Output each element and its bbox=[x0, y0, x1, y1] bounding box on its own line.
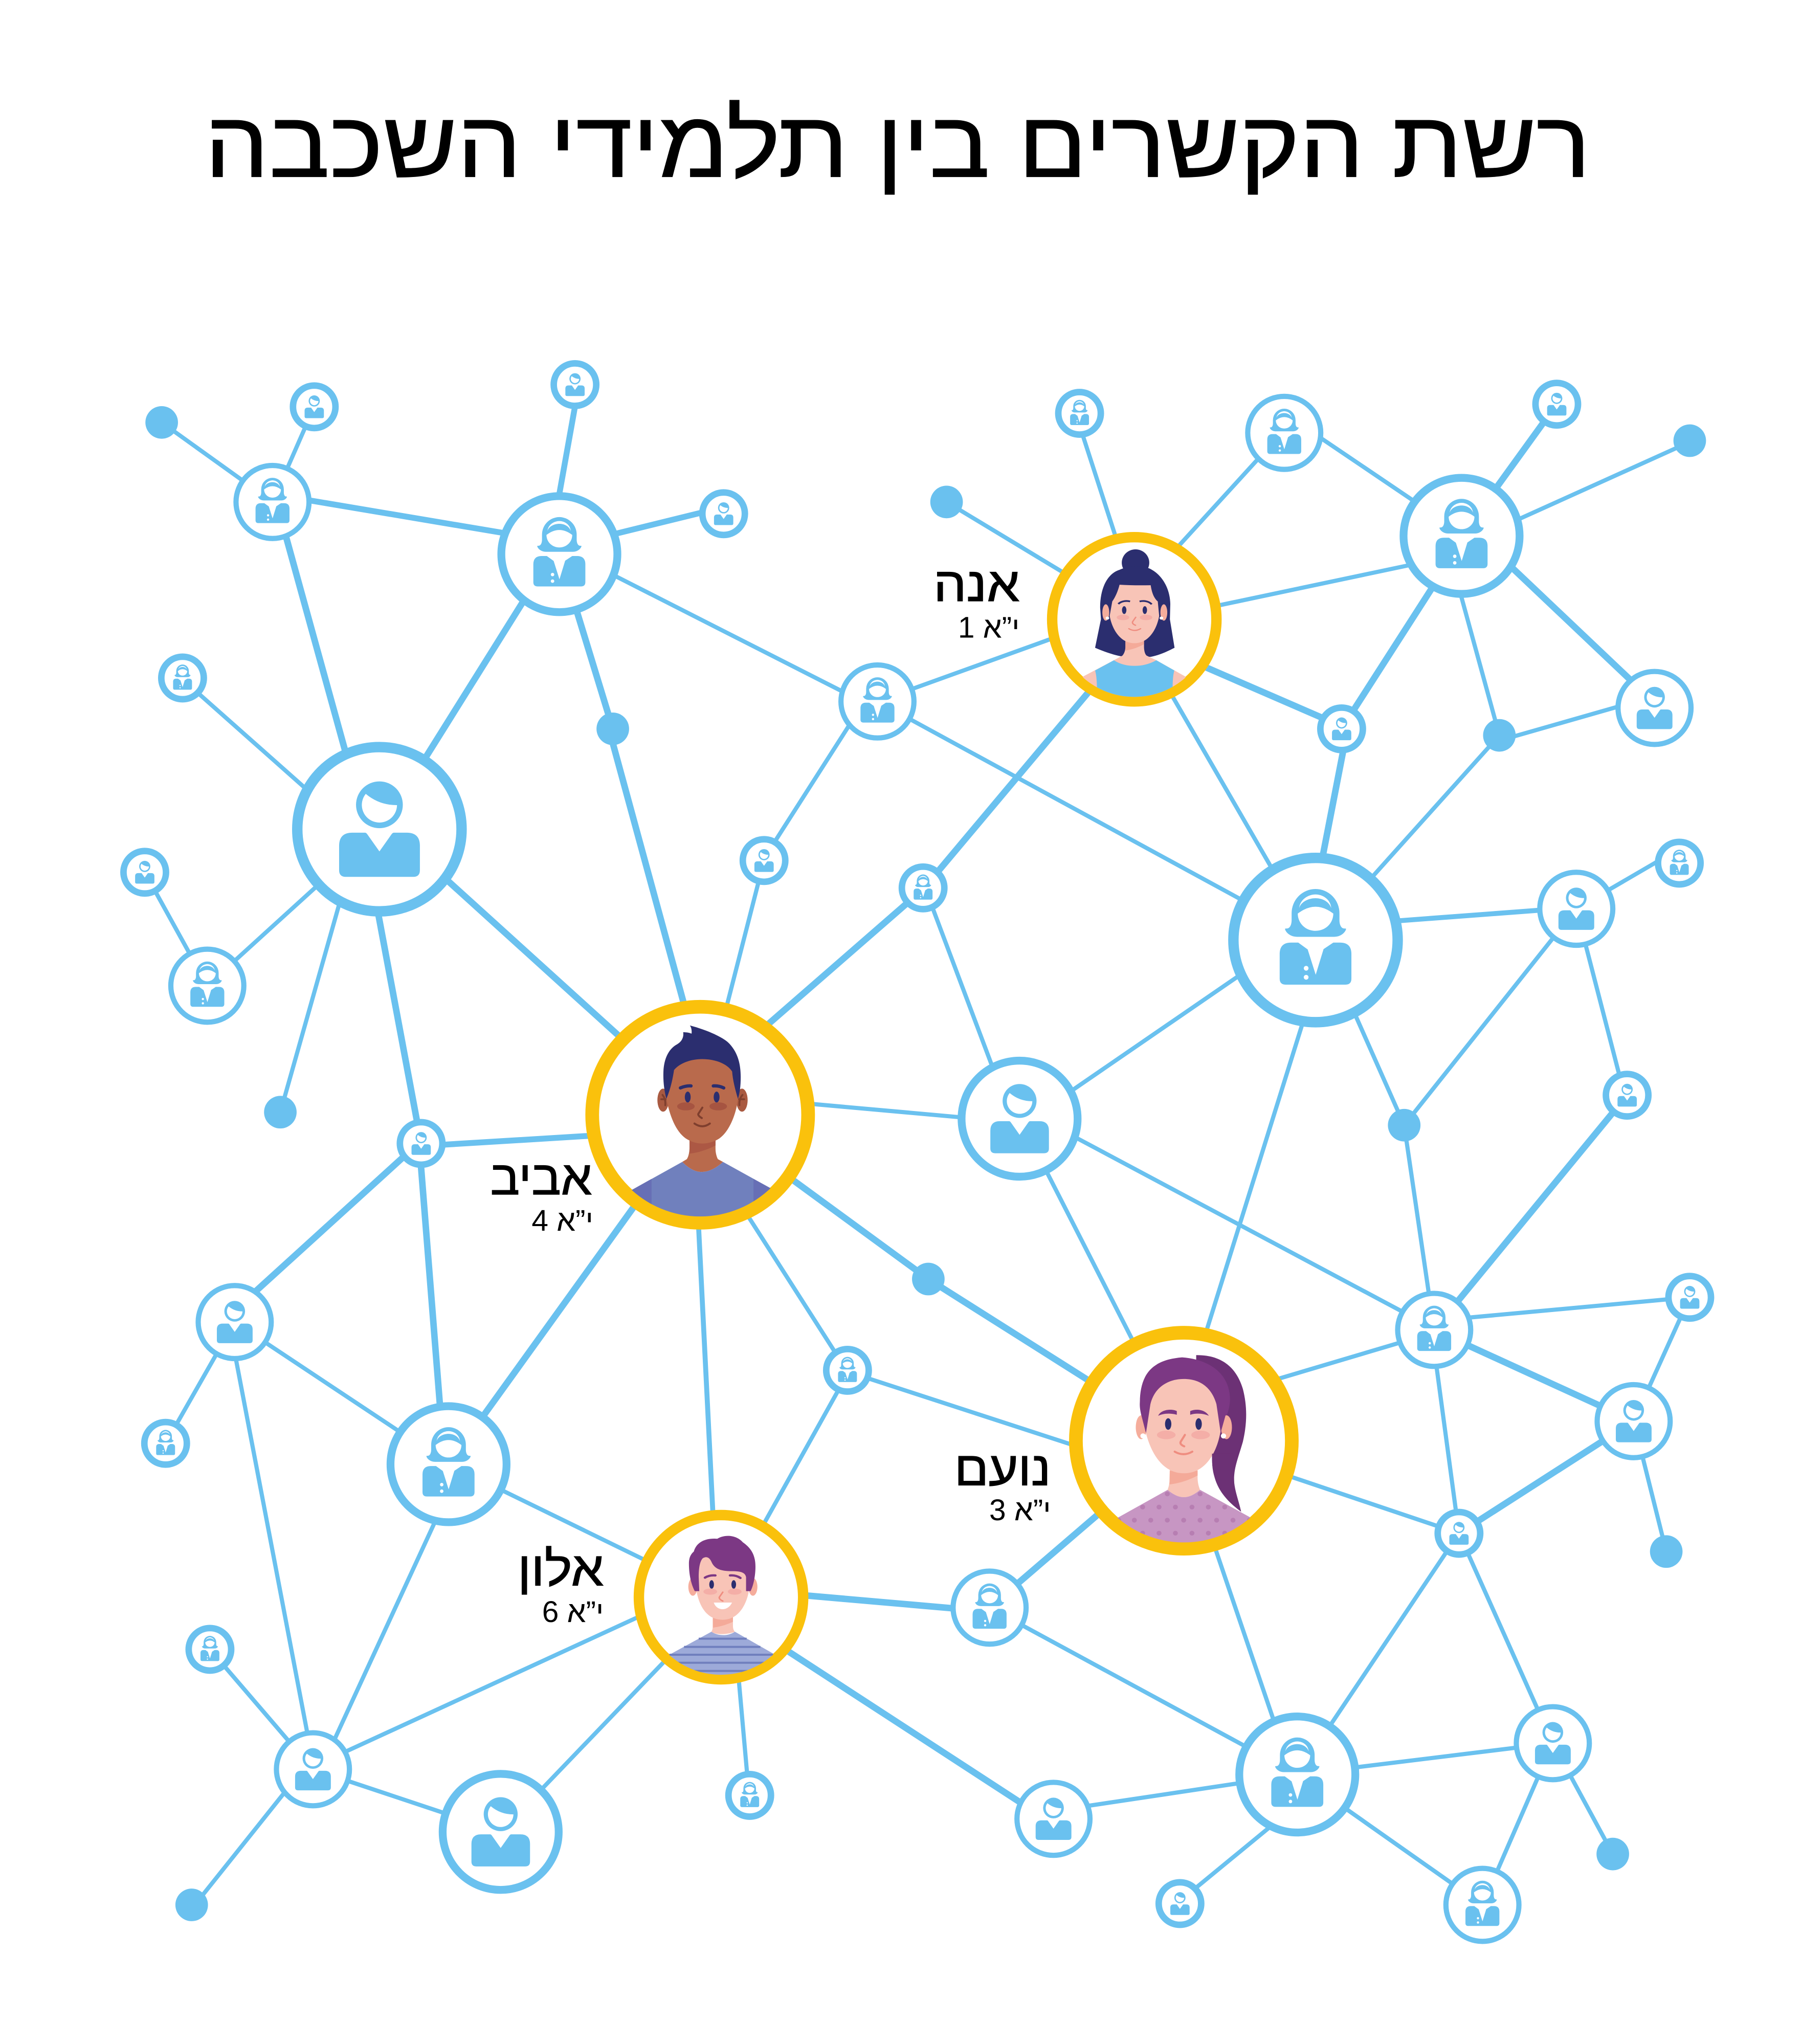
small student nodes bbox=[123, 363, 1711, 1925]
label: Aviv bbox=[490, 1151, 593, 1237]
title: רשת הקשרים בין תלמידי השכבה bbox=[205, 92, 1591, 196]
label: Ana: אנה bbox=[933, 558, 1019, 611]
label: Noam: נועם bbox=[954, 1441, 1051, 1495]
large student nodes bbox=[390, 478, 1520, 1890]
portrait: Ana bbox=[1052, 537, 1216, 701]
label: Alon: אלון bbox=[518, 1542, 604, 1596]
label: Aviv: י”א 4 bbox=[531, 1204, 593, 1237]
label: Ana: י”א 1 bbox=[958, 611, 1019, 644]
portrait: Alon bbox=[639, 1515, 803, 1679]
extra large node: male student bbox=[297, 747, 461, 912]
label: Alon bbox=[518, 1542, 604, 1629]
portrait: Aviv bbox=[592, 1007, 808, 1229]
network connection lines bbox=[145, 385, 1689, 1909]
solid network dots bbox=[145, 406, 1706, 1921]
portrait: Noam bbox=[1076, 1333, 1292, 1556]
extra large node: female student bbox=[1233, 858, 1398, 1022]
label: Noam bbox=[954, 1441, 1051, 1527]
label: Alon: י”א 6 bbox=[542, 1595, 604, 1629]
medium student nodes bbox=[171, 396, 1691, 1941]
label: Ana bbox=[933, 558, 1019, 644]
label: Noam: י”א 3 bbox=[989, 1494, 1051, 1527]
label: Aviv: אביב bbox=[490, 1151, 592, 1205]
